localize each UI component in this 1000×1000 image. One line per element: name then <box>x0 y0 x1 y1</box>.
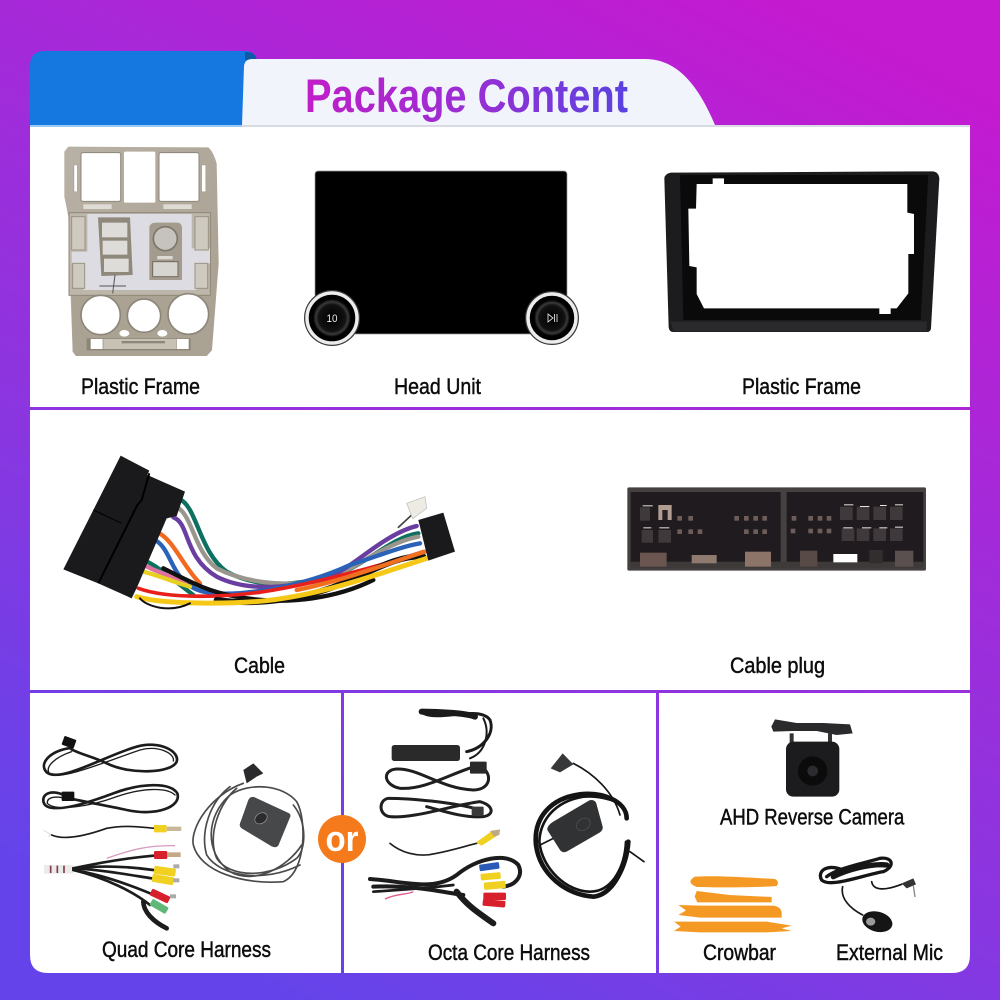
cable plug <box>627 487 926 571</box>
label: plastic frame right: Plastic Frame <box>742 374 861 399</box>
plastic frame silver <box>64 147 219 356</box>
panel: accessories <box>659 693 970 973</box>
or badge <box>318 815 366 863</box>
label: quad core harness: Quad Core Harness <box>102 937 271 962</box>
label: cable: Cable <box>234 653 285 678</box>
label: octa core harness: Octa Core Harness <box>428 940 590 965</box>
plastic frame black <box>664 171 939 332</box>
label: cable plug: Cable plug <box>730 653 825 678</box>
GPS <box>536 763 644 897</box>
label: camera: AHD Reverse Camera <box>720 805 905 830</box>
USB cables <box>43 745 178 837</box>
header tab <box>30 51 715 125</box>
antenna strip <box>422 712 491 758</box>
panel: octa core harness <box>344 693 656 973</box>
title: Package Content <box>305 69 628 122</box>
or badge: or <box>326 818 358 859</box>
label: plastic frame: Plastic Frame <box>81 374 200 399</box>
reverse camera <box>771 719 853 797</box>
RCA bundle <box>370 858 520 923</box>
panel: top row <box>30 125 970 407</box>
head unit <box>304 171 579 346</box>
pry tools <box>674 876 792 932</box>
mic <box>820 858 902 915</box>
panel: quad core harness <box>30 693 341 973</box>
left knob <box>304 290 360 346</box>
loops <box>381 765 491 855</box>
label: crowbar: Crowbar <box>703 940 776 965</box>
GPS cable <box>193 783 304 882</box>
cable harness <box>63 456 455 608</box>
RCA cluster <box>107 846 175 858</box>
label: head unit: Head Unit <box>394 374 481 399</box>
label: external mic: External Mic <box>836 940 943 965</box>
right knob <box>525 291 579 345</box>
panel: middle row <box>30 410 970 690</box>
left knob: 10 <box>326 313 338 325</box>
